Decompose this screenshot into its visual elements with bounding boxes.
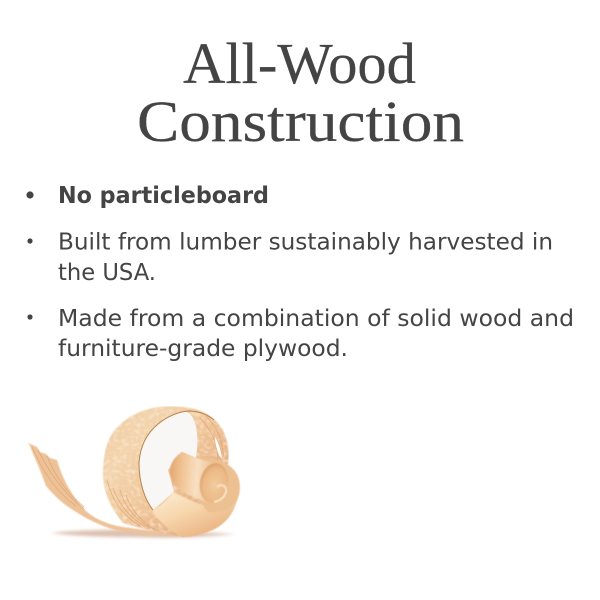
bullet: solid wood and plywood xyxy=(27,304,574,362)
title xyxy=(137,31,464,154)
bullet: built from lumber: the USA. xyxy=(58,258,156,286)
main band and back strip xyxy=(103,406,229,537)
slot in back strip xyxy=(215,437,222,459)
band edge line xyxy=(139,411,214,510)
illustration: wood shaving xyxy=(28,406,240,538)
title: Construction xyxy=(137,89,464,154)
band grain xyxy=(107,416,224,530)
tail grain xyxy=(32,447,84,509)
roll end highlight xyxy=(214,485,226,502)
bullet: built from lumber: Built from lumber sustainably harvested in xyxy=(58,228,553,256)
lower band xyxy=(152,492,238,537)
inner roll xyxy=(170,452,214,503)
outer spiral xyxy=(190,458,240,513)
bullet: solid wood and plywood: furniture-grade plywood. xyxy=(58,334,348,362)
shadow xyxy=(50,530,235,538)
bullet: built from lumber xyxy=(27,228,553,286)
bullet: no particleboard: No particleboard xyxy=(58,181,269,209)
tail of shaving xyxy=(28,443,180,537)
bullet: solid wood and plywood: Made from a combination of solid wood and xyxy=(58,304,574,332)
bullet list xyxy=(26,181,574,362)
opening of the curl xyxy=(139,412,197,510)
roll end xyxy=(197,461,231,505)
title: All-Wood xyxy=(183,31,416,96)
